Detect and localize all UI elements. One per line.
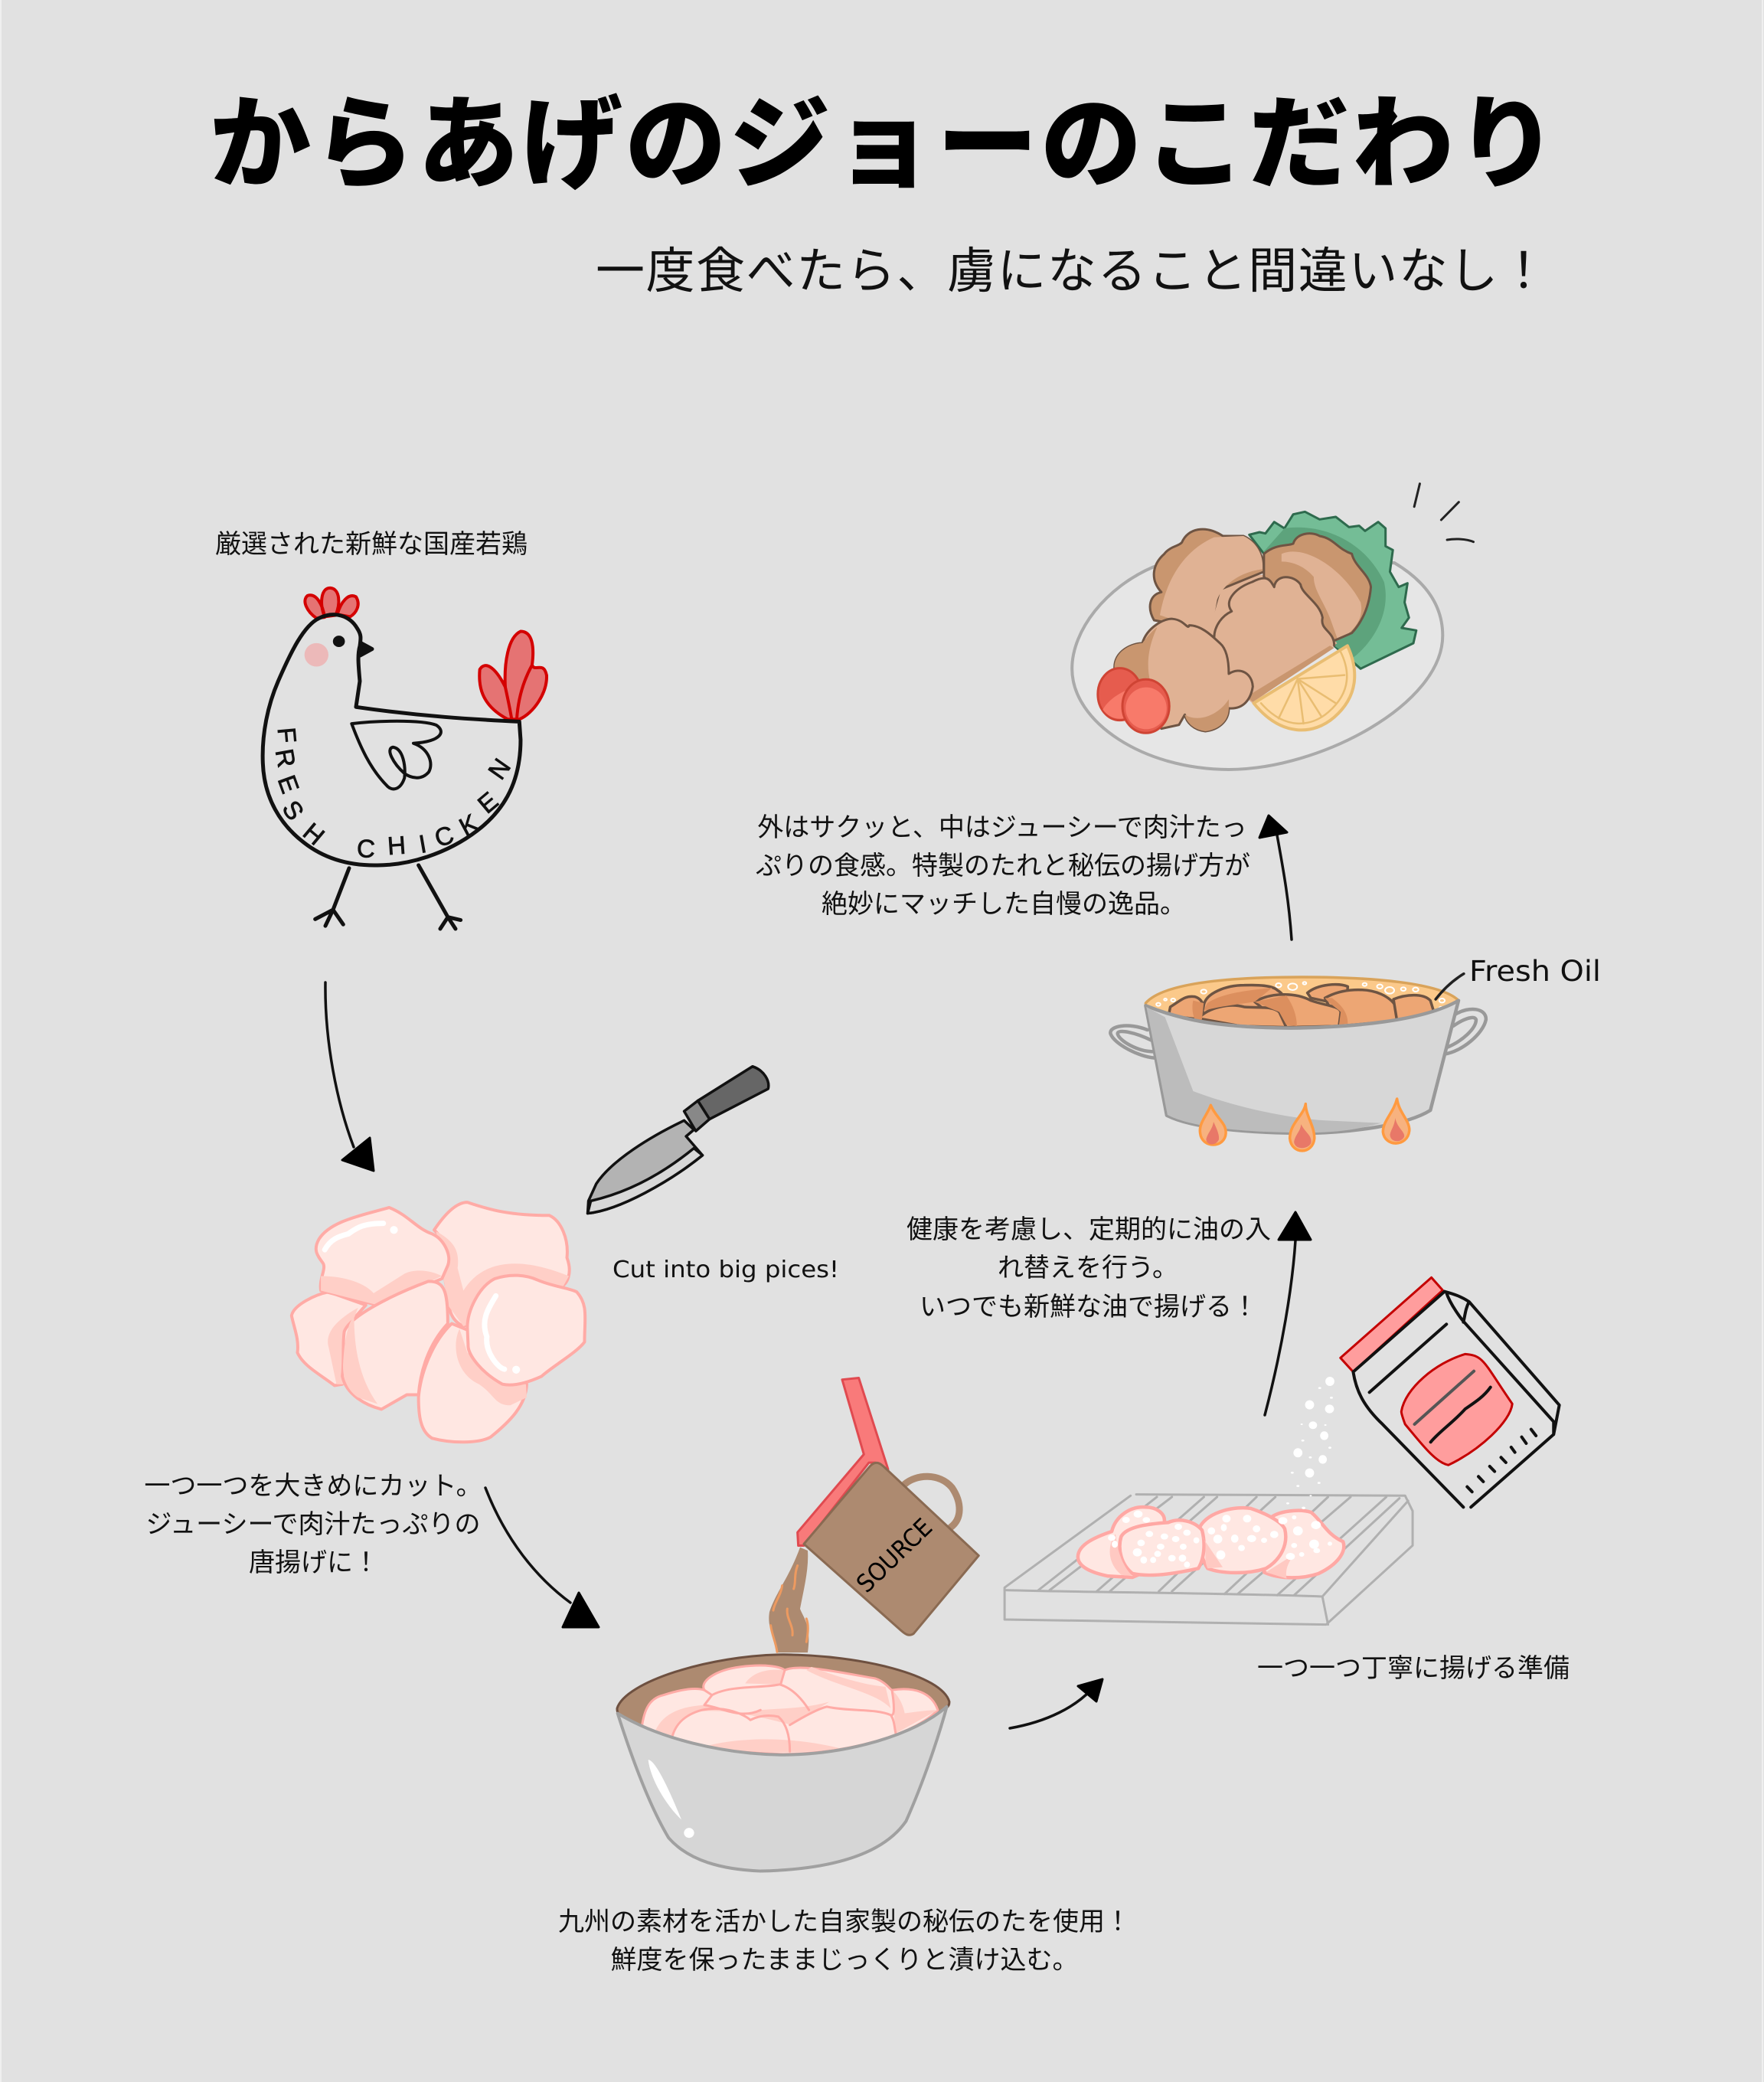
icon: fresh chicken [263, 588, 547, 929]
text: step 3 marinade caption: 鮮度を保ったままじっくりと漬け込む。 [611, 1946, 1078, 1975]
arrow: pot to plate [1259, 815, 1292, 940]
text: step 2 cutting caption: 一つ一つを大きめにカット。 [144, 1472, 482, 1501]
seasoned chicken [1078, 1507, 1344, 1577]
icon: fresh chicken: F [273, 726, 302, 744]
subtitle: 一度食べたら、虜になること間違いなし！ [596, 243, 1548, 299]
tray [1004, 1495, 1413, 1625]
meat pieces [292, 1202, 585, 1442]
bubbles [1156, 982, 1445, 1009]
icon: fresh chicken: I [416, 829, 429, 858]
text: step 5 oil caption: れ替えを行う。 [998, 1253, 1178, 1283]
icon: fresh chicken: E [472, 786, 503, 819]
text: step 5 oil caption: いつでも新鮮な油で揚げる！ [920, 1293, 1258, 1322]
text: step 2 cutting caption: ジューシーで肉汁たっぷりの [146, 1510, 480, 1539]
icon: fresh chicken: E [273, 771, 305, 797]
leader line to fresh oil label [1436, 974, 1464, 999]
icon: frying pot [1110, 974, 1486, 1151]
oil [1145, 977, 1459, 1028]
knife [588, 1067, 769, 1214]
plate [1072, 563, 1442, 770]
icon: fresh chicken: N [482, 753, 516, 784]
text: step 2 cutting caption [144, 1472, 482, 1577]
icon: fresh chicken: C [356, 834, 376, 863]
seasoning bag [1341, 1277, 1560, 1507]
icon: fresh chicken: S [277, 795, 309, 825]
arrow: tray to pot [1265, 1212, 1311, 1415]
arrow: chicken to meat [325, 982, 374, 1171]
marinating meat [641, 1665, 938, 1754]
lettuce [1250, 512, 1416, 668]
lemon [1253, 646, 1354, 730]
salt [1108, 1377, 1334, 1567]
sauce jug [798, 1378, 978, 1635]
text: step 2 cutting caption: 唐揚げに！ [249, 1548, 379, 1577]
pot handles [1110, 1009, 1486, 1058]
label: fresh oil: Fresh Oil [1469, 955, 1601, 988]
text: step 6 finished karaage caption [756, 813, 1250, 919]
icon: tray with seasoned chicken and seasoning bag [1004, 1277, 1560, 1625]
text: step 4 preparation caption: 一つ一つ丁寧に揚げる準備 [1257, 1654, 1570, 1683]
arrow: bowl to tray [1010, 1679, 1102, 1728]
sparkle marks [1414, 484, 1473, 542]
icon: marinating bowl with sauce jug [617, 1378, 978, 1871]
tomatoes [1098, 668, 1169, 733]
icon: fresh chicken: C [431, 820, 457, 852]
icon: fresh chicken: R [270, 747, 301, 770]
bowl inside [617, 1655, 949, 1754]
text: step 6 finished karaage caption: 外はサクッと、中はジューシーで肉汁たっ [757, 813, 1247, 842]
title: からあげのジョーのこだわり [210, 63, 1557, 209]
bowl body [618, 1707, 947, 1871]
text: step 6 finished karaage caption: 絶妙にマッチした自慢の逸品。 [822, 890, 1186, 919]
text: step 3 marinade caption: 九州の素材を活かした自家製の秘伝のたを使用！ [558, 1907, 1131, 1937]
text: step 1 chicken caption: 厳選された新鮮な国産若鶏 [215, 530, 528, 559]
flames [1200, 1099, 1410, 1151]
icon: fresh chicken: K [455, 808, 482, 842]
fried pieces [1168, 985, 1434, 1028]
text: step 5 oil caption: 健康を考慮し、定期的に油の入 [906, 1215, 1271, 1244]
icon: fresh chicken: H [387, 831, 407, 860]
icon: plate of karaage [1072, 484, 1473, 770]
bowl highlight [648, 1760, 694, 1838]
label: cut into big pieces: Cut into big pices! [612, 1257, 839, 1283]
text: step 3 marinade caption [558, 1907, 1131, 1975]
sauce stream [769, 1548, 808, 1652]
text: step 5 oil caption [906, 1215, 1271, 1322]
icon: fresh chicken: H [298, 817, 330, 851]
arrow: meat to bowl [485, 1488, 599, 1627]
icon: raw chicken pieces and knife [292, 1067, 769, 1442]
label: source on jug: SOURCE [851, 1512, 938, 1598]
text: step 6 finished karaage caption: ぷりの食感。特製のたれと秘伝の揚げ方が [756, 851, 1250, 881]
karaage pieces [1115, 529, 1371, 731]
pot body [1145, 1001, 1459, 1133]
